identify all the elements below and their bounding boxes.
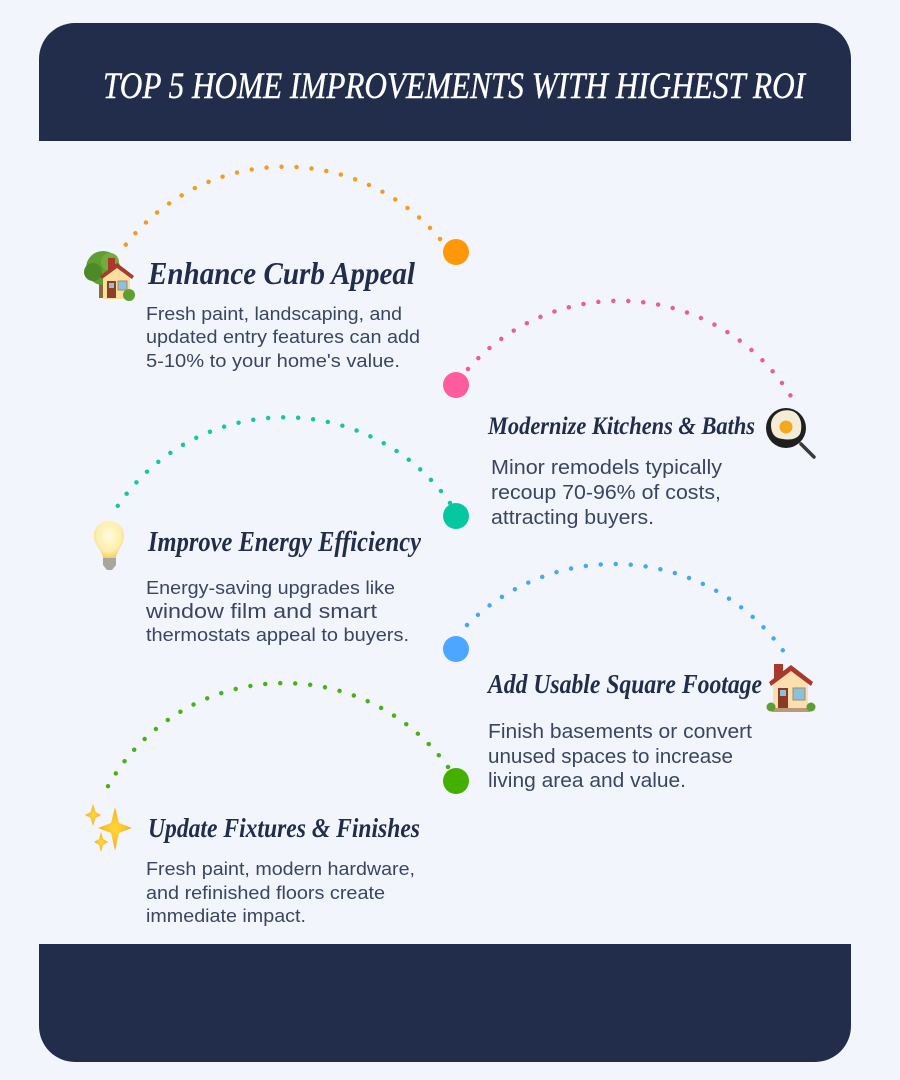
icon: sparkles	[85, 804, 132, 852]
body text: updated entry features can add	[146, 327, 420, 347]
body text: Finish basements or convert	[488, 721, 752, 743]
node: blue	[443, 636, 469, 662]
body text: window film and smart	[145, 601, 378, 623]
body text: 5-10% to your home's value.	[146, 351, 400, 371]
node: pink	[443, 372, 469, 398]
icon: light bulb	[94, 521, 124, 570]
panel: enhance curb appeal	[84, 167, 469, 371]
dotted arc: green	[107, 683, 448, 788]
icon: frying pan with egg	[766, 408, 814, 457]
body text: recoup 70-96% of costs,	[491, 482, 721, 504]
panel: add usable square footage	[443, 564, 816, 792]
body text	[488, 721, 752, 792]
icon: house	[766, 664, 816, 712]
body text: immediate impact.	[146, 906, 306, 926]
body text	[491, 457, 722, 529]
body text: thermostats appeal to buyers.	[146, 625, 409, 645]
node: green	[443, 768, 469, 794]
heading: Update Fixtures & Finishes	[148, 813, 420, 843]
panel: improve energy efficiency	[94, 417, 469, 645]
body text: Energy-saving upgrades like	[146, 578, 395, 598]
heading: Add Usable Square Footage	[486, 669, 762, 699]
body text: and refinished floors create	[146, 883, 385, 903]
body text: unused spaces to increase	[488, 746, 733, 768]
icon: house with tree	[84, 251, 135, 301]
node: teal	[443, 503, 469, 529]
body text: Fresh paint, landscaping, and	[146, 304, 402, 324]
header banner	[39, 23, 851, 141]
heading: Modernize Kitchens & Baths	[487, 413, 755, 440]
body text: Minor remodels typically	[491, 457, 722, 479]
body text	[146, 859, 415, 926]
heading: Improve Energy Efficiency	[147, 527, 421, 558]
panel: update fixtures and finishes	[85, 683, 469, 926]
dotted arc: pink	[468, 301, 792, 398]
body text: attracting buyers.	[491, 507, 654, 529]
body text: living area and value.	[488, 770, 686, 792]
body text: Fresh paint, modern hardware,	[146, 859, 415, 879]
dotted arc: blue	[467, 564, 784, 652]
body text	[145, 578, 409, 645]
panel: modernize kitchens and baths	[443, 301, 814, 529]
heading: Enhance Curb Appeal	[147, 255, 415, 291]
footer banner	[39, 944, 851, 1062]
dotted arc: teal	[115, 417, 450, 510]
body text	[146, 304, 420, 371]
node: orange	[443, 239, 469, 265]
dotted arc: orange	[124, 167, 440, 247]
